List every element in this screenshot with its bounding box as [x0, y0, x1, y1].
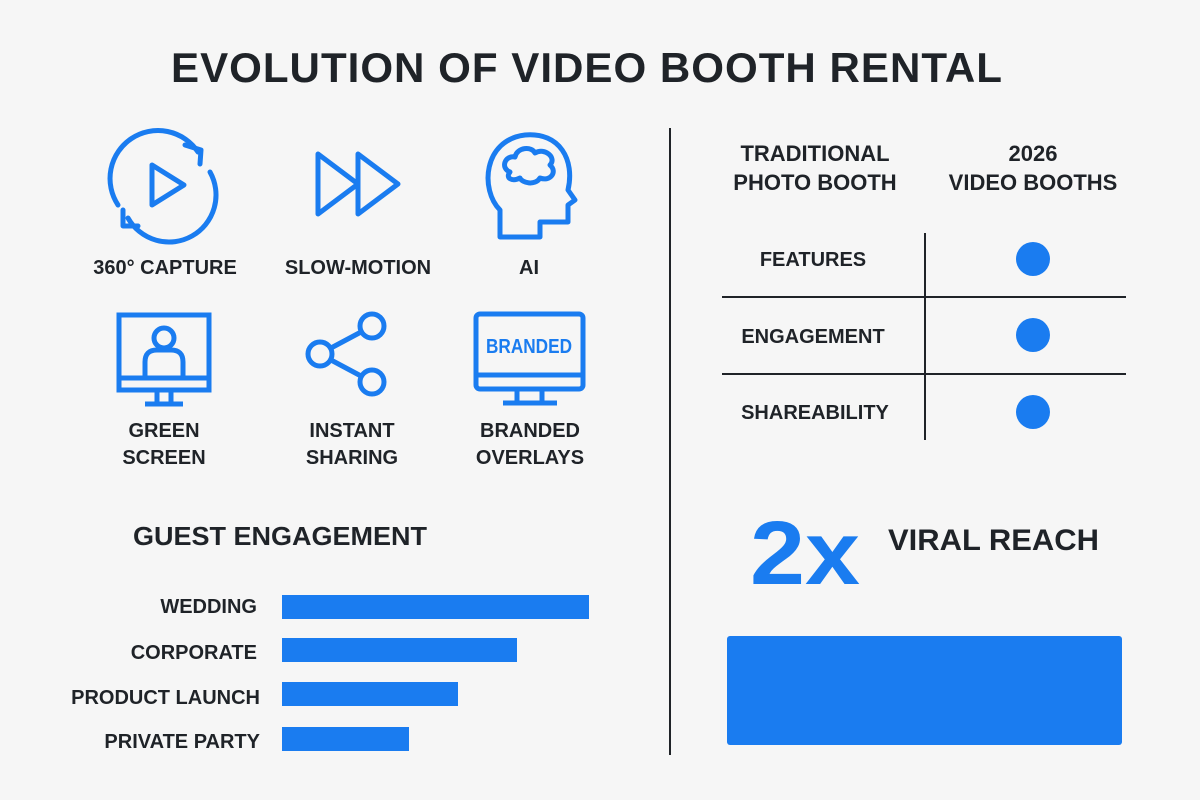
icon: branded monitor [476, 314, 583, 403]
feature labels: SHARING [306, 447, 398, 469]
feature labels: AI [519, 257, 539, 279]
icon: 360 capture [110, 131, 216, 242]
feature labels: SCREEN [122, 447, 206, 469]
bar chart: WEDDING [160, 596, 257, 618]
stat: 2x viral reach: VIRAL REACH [888, 524, 1099, 557]
comparison table: PHOTO BOOTH [733, 170, 897, 195]
comparison table: ENGAGEMENT [741, 326, 885, 348]
comparison table: VIDEO BOOTHS [949, 170, 1117, 195]
icon: branded monitor: BRANDED [486, 336, 572, 358]
bar chart [71, 595, 589, 753]
feature labels: BRANDED [480, 420, 580, 442]
comparison table: FEATURES [760, 249, 866, 271]
feature labels: SLOW-MOTION [285, 257, 431, 279]
comparison table [722, 141, 1126, 440]
comparison table: TRADITIONAL [740, 141, 890, 166]
title: EVOLUTION OF VIDEO BOOTH RENTAL [171, 44, 1003, 91]
icon: green screen [119, 315, 209, 404]
icon: sharing [308, 314, 384, 394]
panel: features icons [93, 131, 584, 469]
feature labels: GREEN [128, 420, 200, 442]
comparison table: 2026 [1009, 141, 1057, 166]
heading: guest engagement: GUEST ENGAGEMENT [133, 521, 427, 551]
bar chart: CORPORATE [131, 642, 257, 664]
bar chart: PRIVATE PARTY [104, 731, 261, 753]
icon: slow-motion [318, 154, 398, 214]
blue block [727, 636, 1122, 745]
bar chart: PRODUCT LAUNCH [71, 687, 260, 709]
comparison table: SHAREABILITY [741, 402, 890, 424]
feature labels: OVERLAYS [476, 447, 584, 469]
icon: AI head [488, 135, 575, 237]
stat: 2x viral reach: 2x [750, 504, 860, 604]
stat: 2x viral reach [750, 504, 1099, 604]
feature labels: 360° CAPTURE [93, 257, 237, 279]
feature labels [93, 257, 584, 469]
feature labels: INSTANT [309, 420, 395, 442]
